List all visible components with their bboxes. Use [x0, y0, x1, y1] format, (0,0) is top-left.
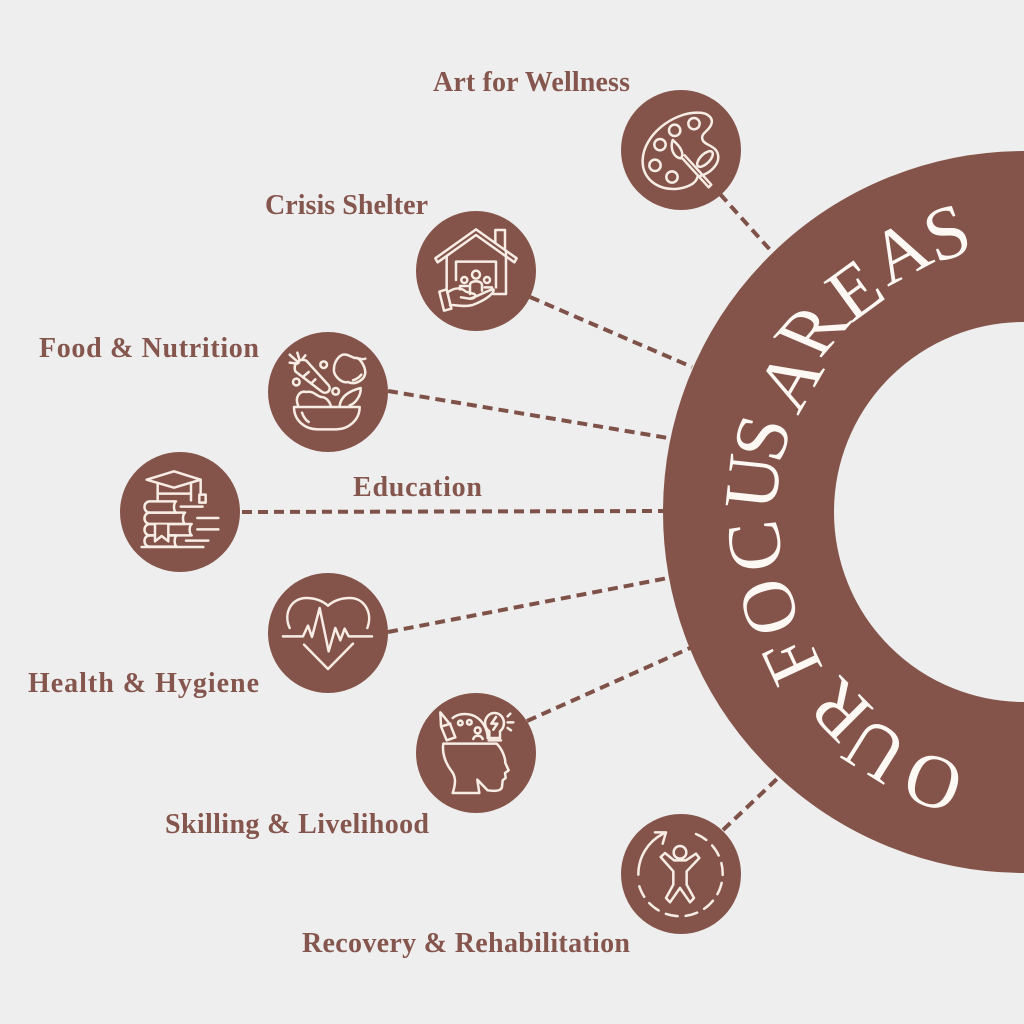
focus area: Crisis Shelter	[265, 190, 692, 367]
focus area: Education	[120, 452, 663, 572]
icon badge: person with recovery cycle	[621, 814, 741, 934]
connector	[720, 194, 772, 252]
icon badge: head with ideas	[416, 693, 536, 813]
focus area: Art for Wellness	[433, 67, 772, 252]
title: OUR FOCUS AREAS: U	[829, 700, 921, 800]
title: OUR FOCUS AREAS: U	[708, 450, 798, 514]
connector	[388, 391, 668, 438]
focus area: Food & Nutrition	[39, 332, 668, 452]
connector	[388, 578, 668, 632]
focus area: Skilling & Livelihood	[165, 648, 690, 840]
label: Health & Hygiene	[28, 668, 259, 699]
icon badge: heart with pulse	[268, 573, 388, 693]
label: Skilling & Livelihood	[165, 809, 429, 840]
title: OUR FOCUS AREAS: A	[740, 335, 840, 425]
connector	[242, 511, 663, 512]
label: Art for Wellness	[433, 67, 630, 98]
connector	[723, 777, 779, 830]
title: OUR FOCUS AREAS: O	[893, 733, 973, 831]
icon badge: salad bowl	[268, 332, 388, 452]
title: OUR FOCUS AREAS: E	[812, 242, 898, 338]
connector	[527, 648, 690, 721]
focus area: Recovery & Rehabilitation	[302, 777, 779, 959]
title: OUR FOCUS AREAS	[708, 186, 981, 831]
label: Education	[353, 472, 482, 503]
connector	[530, 297, 692, 367]
icon badge: house with family in hand	[416, 211, 536, 331]
ring	[748, 236, 1024, 788]
label: Recovery & Rehabilitation	[302, 928, 630, 959]
icon badge: books and graduation cap	[120, 452, 240, 572]
title: OUR FOCUS AREAS: R	[754, 294, 869, 366]
label: Crisis Shelter	[265, 190, 428, 221]
title: OUR FOCUS AREAS: S	[913, 186, 981, 280]
panel: focus ring with curved title	[708, 186, 1024, 831]
label: Food & Nutrition	[39, 333, 259, 364]
title: OUR FOCUS AREAS: A	[856, 202, 944, 302]
title: OUR FOCUS AREAS: F	[745, 623, 839, 697]
focus area: Health & Hygiene	[28, 573, 668, 699]
title: OUR FOCUS AREAS: R	[792, 662, 888, 758]
icon badge: palette	[621, 90, 741, 210]
title: OUR FOCUS AREAS: C	[710, 516, 800, 576]
title: OUR FOCUS AREAS: S	[716, 406, 808, 470]
title: OUR FOCUS AREAS: O	[721, 569, 817, 645]
